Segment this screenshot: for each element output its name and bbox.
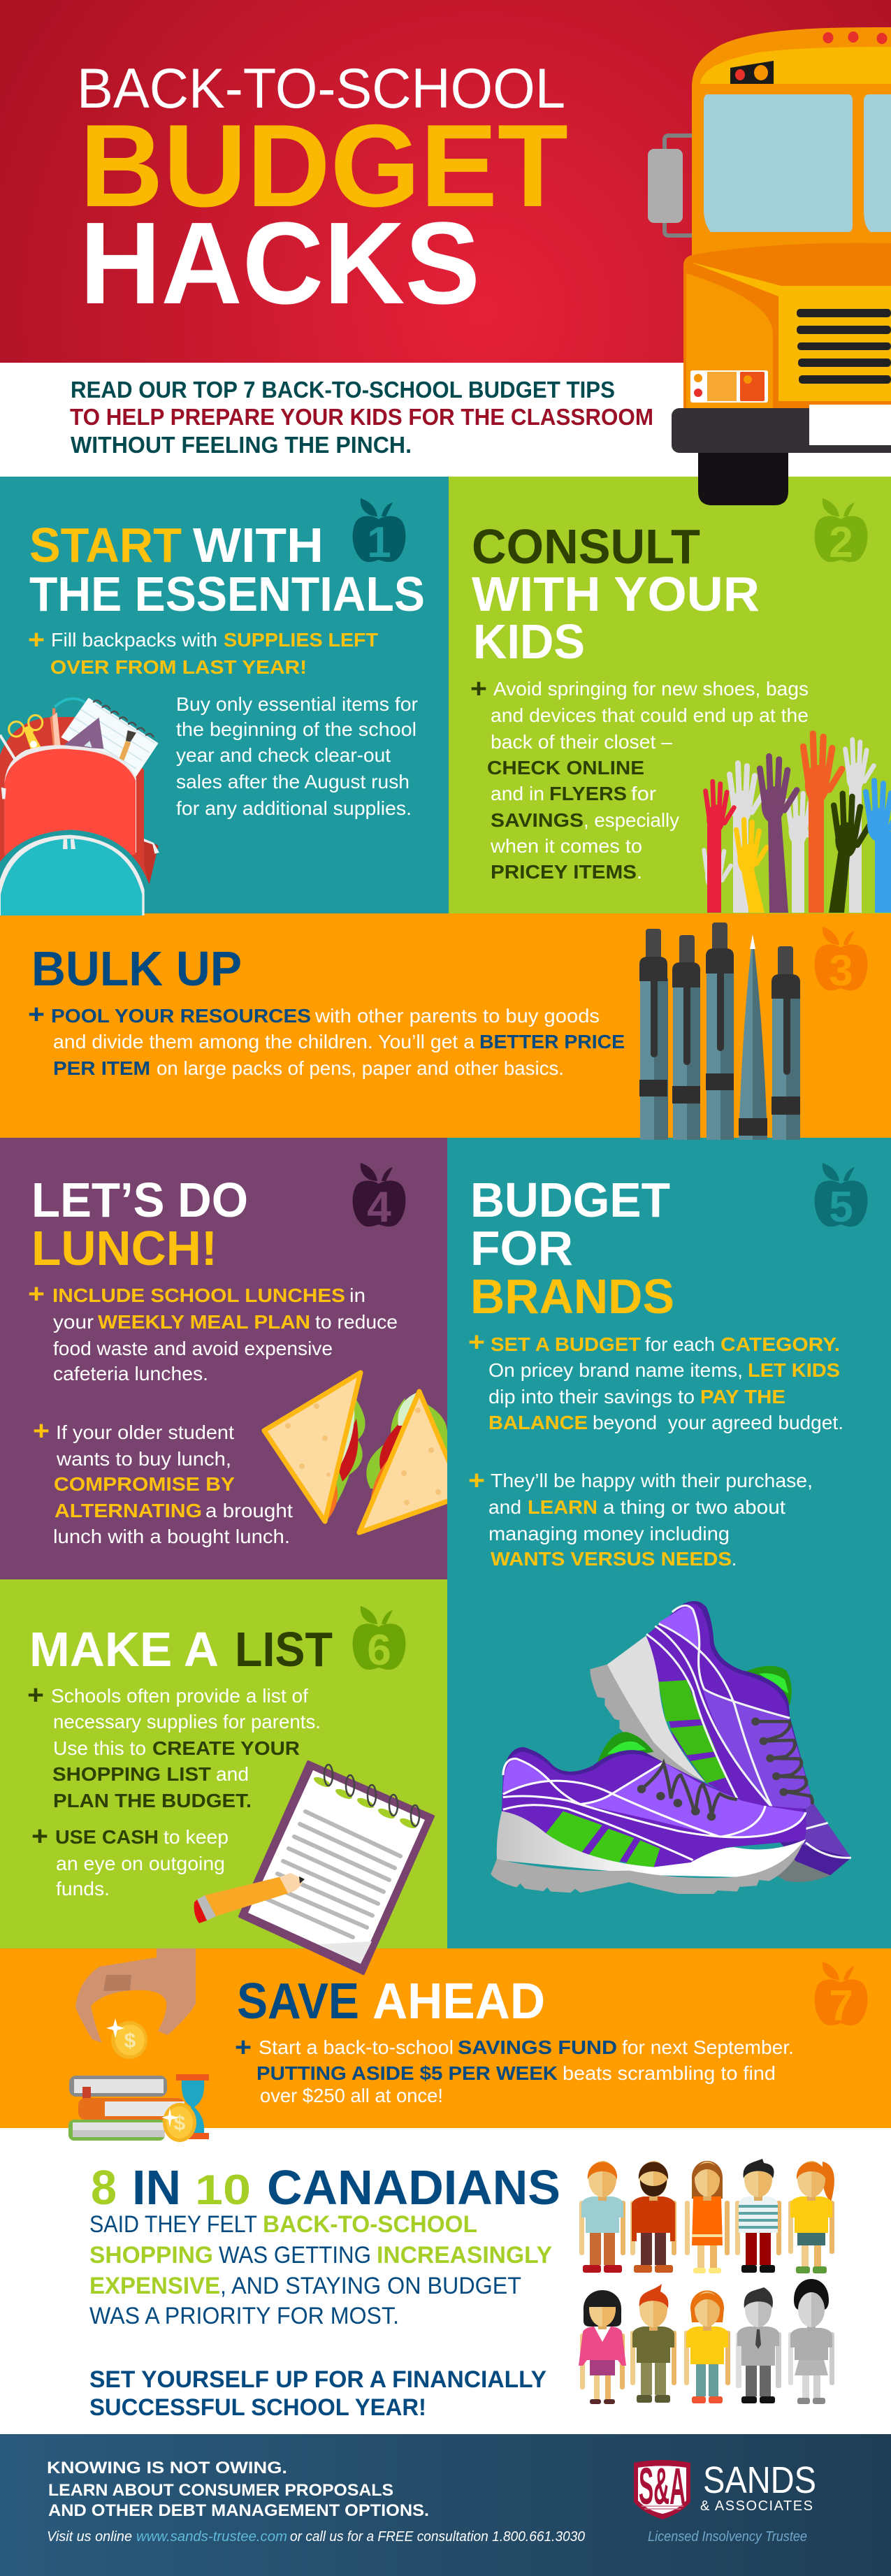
text block: and divide them among the children. You’ll get a bbox=[53, 1031, 475, 1052]
text block: use cash bbox=[31, 1822, 229, 1900]
yellow hand bbox=[737, 820, 767, 913]
illustration: raised hands bbox=[704, 734, 891, 913]
text block: use cash: funds. bbox=[56, 1878, 110, 1900]
icon: apple 2 bbox=[815, 498, 867, 567]
text block: wants versus needs: + bbox=[468, 1466, 485, 1496]
heading: WITH YOUR bbox=[472, 567, 760, 621]
text block: when it comes to bbox=[490, 835, 642, 857]
background bbox=[0, 1948, 891, 2128]
heading: SAVE bbox=[237, 1974, 359, 2029]
pen 5 bbox=[772, 946, 800, 1140]
heading: LIST bbox=[235, 1622, 333, 1677]
icon: apple 1 bbox=[353, 498, 405, 567]
footer message: KNOWING IS NOT OWING. bbox=[47, 2459, 287, 2477]
icon: apple 6 bbox=[353, 1606, 405, 1674]
text block: supplies left over: Fill backpacks with bbox=[51, 629, 217, 651]
contact line bbox=[47, 2529, 585, 2545]
text block: essential items bbox=[176, 693, 418, 819]
pen 2 bbox=[672, 935, 700, 1140]
text block: for next September. bbox=[622, 2036, 794, 2058]
mirror bbox=[648, 136, 692, 236]
illustration: hand dropping coin bbox=[75, 1948, 196, 2059]
text block: + bbox=[28, 1000, 45, 1029]
tire bbox=[698, 447, 788, 505]
heading: WITH bbox=[193, 518, 324, 572]
logo: Sands and Associates: & ASSOCIATES bbox=[700, 2498, 813, 2514]
text block: PUTTING ASIDE $5 PER WEEK bbox=[256, 2062, 558, 2084]
text block: essential items: for any additional supplies. bbox=[176, 797, 412, 819]
person 5 bbox=[788, 2161, 834, 2273]
text block: wants versus needs: They’ll be happy with their purchase, bbox=[491, 1470, 813, 1491]
text block: shopping list: PLAN THE BUDGET. bbox=[53, 1790, 252, 1811]
text block: older student bbox=[33, 1417, 293, 1547]
text block: use cash: an eye on outgoing bbox=[56, 1853, 225, 1874]
orange hand bbox=[803, 734, 842, 913]
illustration: stacked books, hourglass, coin bbox=[68, 2074, 209, 2142]
text block: set a budget: BALANCE bbox=[488, 1412, 588, 1433]
text block: , especially bbox=[584, 809, 679, 831]
text block: older student: a brought bbox=[205, 1500, 293, 1521]
text block: Avoid springing for new shoes, bags bbox=[493, 678, 809, 700]
pen 4 pointed bbox=[739, 934, 767, 1140]
heading bbox=[472, 519, 760, 669]
heading: BRANDS bbox=[470, 1269, 674, 1324]
icon: apple 1: 1 bbox=[367, 519, 391, 567]
illustration: notepad and pencil bbox=[194, 1762, 433, 1974]
text block: set a budget: CATEGORY. bbox=[720, 1333, 840, 1355]
text block: essential items: Buy only essential items for bbox=[176, 693, 418, 715]
call to action text bbox=[89, 2366, 546, 2421]
contact line: Visit us online bbox=[47, 2529, 132, 2545]
dark hand bbox=[829, 794, 869, 913]
title: HACKS bbox=[80, 198, 480, 328]
contact line: or call us for a FREE consultation 1.800.661.3030 bbox=[290, 2529, 585, 2545]
person 3 bbox=[685, 2161, 730, 2273]
panel 1: start with the essentials bbox=[0, 477, 449, 916]
panel 7: save ahead bbox=[0, 1948, 891, 2142]
illustration: school bus bbox=[648, 27, 891, 505]
text block: shopping list bbox=[27, 1681, 321, 1811]
text block: set a budget: On pricey brand name items, bbox=[488, 1359, 743, 1381]
heading bbox=[29, 1622, 333, 1677]
text block bbox=[470, 674, 809, 883]
text block: older student: + bbox=[33, 1417, 50, 1446]
text block: for bbox=[631, 783, 656, 804]
heading bbox=[237, 1974, 545, 2029]
panel 6: make a list bbox=[0, 1579, 447, 1974]
text block: over $250 all at once! bbox=[260, 2085, 443, 2106]
statistic text: WAS A PRIORITY FOR MOST. bbox=[89, 2303, 399, 2329]
text block: wants versus needs: managing money including bbox=[488, 1523, 730, 1544]
text block: meal plan: in bbox=[349, 1285, 365, 1306]
text block: use cash: to keep bbox=[164, 1826, 229, 1848]
text block: meal plan: cafeteria lunches. bbox=[53, 1363, 208, 1384]
text block: meal plan bbox=[28, 1280, 398, 1384]
intro text: TO HELP PREPARE YOUR KIDS FOR THE CLASSROOM bbox=[70, 404, 653, 430]
footer message bbox=[47, 2459, 429, 2520]
statistic text: WAS GETTING bbox=[219, 2242, 371, 2269]
person 4 bbox=[735, 2159, 781, 2273]
text block: set a budget bbox=[468, 1328, 843, 1433]
text block: essential items: the beginning of the school bbox=[176, 718, 416, 740]
illustration: running shoes bbox=[491, 1601, 851, 1894]
pen 1 bbox=[639, 929, 668, 1140]
person 6 bbox=[579, 2290, 626, 2404]
warning lights bbox=[730, 61, 774, 84]
text block: meal plan: food waste and avoid expensive bbox=[53, 1338, 333, 1359]
icon: apple 2: 2 bbox=[829, 519, 853, 567]
logo: Sands and Associates: S&A bbox=[639, 2457, 686, 2515]
text block: shopping list: CREATE YOUR bbox=[152, 1737, 300, 1759]
text block: wants versus needs: WANTS VERSUS NEEDS bbox=[491, 1548, 732, 1570]
icon: apple 4: 4 bbox=[367, 1183, 391, 1231]
heading: LET’S DO bbox=[31, 1173, 248, 1227]
title bbox=[77, 57, 568, 328]
footer message: AND OTHER DEBT MANAGEMENT OPTIONS. bbox=[48, 2501, 429, 2520]
panel 5: budget for brands bbox=[447, 1138, 891, 1948]
text block: older student: COMPROMISE BY bbox=[54, 1473, 235, 1495]
text block: + bbox=[235, 2033, 252, 2062]
text block: set a budget: + bbox=[468, 1328, 485, 1357]
text block: set a budget: PAY THE bbox=[700, 1386, 785, 1408]
background white bbox=[0, 2128, 891, 2434]
header bbox=[0, 0, 891, 505]
icon: apple 7 bbox=[815, 1962, 867, 2030]
text block: PER ITEM bbox=[53, 1057, 150, 1079]
text block: + bbox=[470, 674, 487, 704]
person 10 bbox=[788, 2279, 834, 2404]
red hand bbox=[706, 781, 734, 913]
background bbox=[0, 477, 449, 913]
icon: apple 5 bbox=[815, 1163, 867, 1231]
panel 3: bulk up bbox=[0, 913, 891, 1140]
text block: shopping list: SHOPPING LIST bbox=[52, 1763, 211, 1785]
text block: shopping list: necessary supplies for parents. bbox=[53, 1711, 321, 1732]
text block: set a budget: SET A BUDGET bbox=[491, 1333, 641, 1355]
heading: START bbox=[29, 518, 182, 572]
text block: and devices that could end up at the bbox=[491, 704, 809, 726]
background bbox=[0, 913, 891, 1138]
illustration: stacked books, hourglass, coin: $ bbox=[174, 2112, 186, 2135]
illustration: sandwich bbox=[264, 1373, 463, 1533]
statistic text: EXPENSIVE bbox=[89, 2273, 220, 2299]
footer bbox=[0, 2434, 891, 2576]
statistic text: BACK-TO-SCHOOL bbox=[263, 2211, 477, 2238]
roof lights bbox=[823, 31, 888, 44]
text block: shopping list: Schools often provide a list of bbox=[51, 1685, 308, 1707]
text block: supplies left over: OVER FROM LAST YEAR! bbox=[50, 656, 307, 678]
text block: PRICEY ITEMS bbox=[491, 861, 637, 883]
text block: meal plan: your bbox=[53, 1311, 94, 1333]
text block: POOL YOUR RESOURCES bbox=[51, 1005, 311, 1027]
cab bbox=[692, 27, 891, 259]
statistic text: SHOPPING bbox=[89, 2242, 213, 2269]
text block: back of their closet – bbox=[491, 731, 672, 753]
footer background bbox=[0, 2434, 891, 2576]
text block: wants versus needs: . bbox=[732, 1548, 737, 1570]
text block: SAVINGS bbox=[491, 809, 584, 831]
text block: on large packs of pens, paper and other basics. bbox=[157, 1057, 564, 1079]
red banner bbox=[0, 0, 891, 363]
heading: BUDGET bbox=[470, 1173, 670, 1227]
licence plate bbox=[809, 405, 891, 445]
statistic text bbox=[89, 2211, 552, 2329]
visor bbox=[700, 47, 891, 84]
text block: meal plan: + bbox=[28, 1280, 45, 1309]
text block: meal plan: INCLUDE SCHOOL LUNCHES bbox=[52, 1285, 345, 1306]
white intro band bbox=[0, 363, 891, 477]
text block: Start a back-to-school bbox=[259, 2036, 454, 2058]
text block: older student: ALTERNATING bbox=[55, 1500, 202, 1521]
text block: use cash: + bbox=[31, 1822, 48, 1851]
text block: BETTER PRICE bbox=[479, 1031, 625, 1052]
white hands bbox=[704, 739, 874, 913]
illustration: hand dropping coin: $ bbox=[124, 2029, 136, 2053]
text block: supplies left over bbox=[28, 625, 378, 678]
heading: BULK UP bbox=[31, 941, 242, 996]
text block: meal plan: WEEKLY MEAL PLAN bbox=[98, 1311, 310, 1333]
text block: meal plan: to reduce bbox=[315, 1311, 398, 1333]
statistic text: SAID THEY FELT bbox=[89, 2211, 257, 2238]
text block: essential items: year and check clear-out bbox=[176, 744, 391, 766]
text block: supplies left over: SUPPLIES LEFT bbox=[224, 629, 378, 651]
text block: and in bbox=[491, 783, 544, 804]
text block: beats scrambling to find bbox=[563, 2062, 776, 2084]
pen 3 bbox=[706, 922, 734, 1140]
illustration: backpack bbox=[0, 697, 159, 916]
text block: older student: If your older student bbox=[56, 1421, 234, 1443]
icon: apple 3 bbox=[815, 927, 867, 995]
panel: statistic 8 in 10 Canadians bbox=[0, 2128, 891, 2434]
text block: wants versus needs bbox=[468, 1466, 813, 1570]
icon: apple 3: 3 bbox=[829, 947, 853, 995]
windows bbox=[704, 94, 891, 232]
heading: 8 in 10 Canadians: IN bbox=[132, 2160, 181, 2215]
heading: 8 in 10 Canadians bbox=[91, 2160, 560, 2215]
heading bbox=[29, 518, 425, 621]
text block bbox=[28, 1000, 625, 1079]
title: BACK-TO-SCHOOL bbox=[77, 57, 565, 120]
heading: LUNCH! bbox=[31, 1221, 217, 1275]
text block: FLYERS bbox=[549, 783, 627, 804]
intro text bbox=[70, 377, 653, 458]
person 1 bbox=[579, 2161, 625, 2273]
blue hand bbox=[866, 781, 891, 913]
heading: FOR bbox=[470, 1221, 573, 1275]
title: BUDGET bbox=[80, 100, 568, 231]
heading: 8 in 10 Canadians: 8 bbox=[91, 2160, 117, 2215]
heading: MAKE A bbox=[29, 1622, 219, 1677]
text block: set a budget: for each bbox=[645, 1333, 715, 1355]
hood bbox=[683, 243, 891, 409]
panel 4: let's do lunch bbox=[0, 1138, 463, 1579]
call to action text: SUCCESSFUL SCHOOL YEAR! bbox=[89, 2394, 426, 2421]
text block: set a budget: dip into their savings to bbox=[488, 1386, 695, 1408]
person 9 bbox=[736, 2287, 781, 2403]
text block: SAVINGS FUND bbox=[458, 2036, 617, 2058]
heading: THE ESSENTIALS bbox=[29, 567, 425, 621]
text block: CHECK ONLINE bbox=[487, 757, 644, 779]
heading: KIDS bbox=[473, 614, 585, 669]
icon: apple 4 bbox=[353, 1163, 405, 1231]
statistic text: INCREASINGLY bbox=[377, 2242, 552, 2269]
text block: wants versus needs: a thing or two about bbox=[603, 1496, 785, 1518]
illustration: ten people bbox=[579, 2159, 834, 2404]
background bbox=[0, 1579, 447, 1948]
icon: apple 6: 6 bbox=[367, 1626, 391, 1674]
panel 2: consult with your kids bbox=[449, 477, 891, 913]
purple hand bbox=[760, 756, 797, 913]
text block: supplies left over: + bbox=[28, 625, 45, 655]
person 2 bbox=[630, 2161, 676, 2273]
text block: essential items: sales after the August rush bbox=[176, 771, 410, 793]
call to action text: SET YOURSELF UP FOR A FINANCIALLY bbox=[89, 2366, 546, 2393]
background bbox=[0, 1138, 447, 1579]
headlight bbox=[690, 370, 768, 403]
icon: apple 7: 7 bbox=[829, 1982, 853, 2030]
bumper bbox=[672, 408, 891, 453]
intro text: WITHOUT FEELING THE PINCH. bbox=[71, 432, 412, 458]
grille bbox=[797, 309, 891, 384]
text block: with other parents to buy goods bbox=[314, 1005, 600, 1027]
footer message: LEARN ABOUT CONSUMER PROPOSALS bbox=[48, 2481, 393, 2500]
text block: older student: lunch with a bought lunch. bbox=[53, 1526, 290, 1547]
heading bbox=[470, 1173, 674, 1324]
text block: shopping list: and bbox=[216, 1763, 249, 1785]
person 8 bbox=[684, 2291, 730, 2403]
text block: older student: wants to buy lunch, bbox=[56, 1448, 231, 1470]
text block: . bbox=[637, 861, 642, 883]
text block: wants versus needs: LEARN bbox=[528, 1496, 597, 1518]
heading bbox=[31, 1173, 248, 1275]
statistic text: , AND STAYING ON BUDGET bbox=[220, 2273, 521, 2299]
contact line: www.sands-trustee.com bbox=[136, 2529, 287, 2545]
background bbox=[449, 477, 891, 913]
illustration: pens bbox=[639, 922, 800, 1140]
icon: apple 5: 5 bbox=[829, 1183, 853, 1231]
text block: set a budget: LET KIDS bbox=[748, 1359, 840, 1381]
text block: wants versus needs: and bbox=[488, 1496, 521, 1518]
heading: CONSULT bbox=[472, 519, 700, 574]
text block: shopping list: + bbox=[27, 1681, 44, 1710]
heading: 8 in 10 Canadians: 10 bbox=[195, 2166, 251, 2213]
intro text: READ OUR TOP 7 BACK-TO-SCHOOL BUDGET TIPS bbox=[71, 377, 615, 403]
heading: AHEAD bbox=[372, 1974, 545, 2029]
text block: use cash: USE CASH bbox=[55, 1826, 159, 1848]
text block: set a budget: beyond your agreed budget. bbox=[593, 1412, 843, 1433]
logo: Sands and Associates bbox=[634, 2457, 816, 2519]
trustee tagline: Licensed Insolvency Trustee bbox=[648, 2529, 807, 2545]
background bbox=[447, 1138, 891, 1948]
person 7 bbox=[630, 2284, 676, 2403]
text block: shopping list: Use this to bbox=[53, 1737, 146, 1759]
logo: Sands and Associates: SANDS bbox=[703, 2459, 816, 2501]
text block bbox=[235, 2033, 794, 2106]
heading: 8 in 10 Canadians: CANADIANS bbox=[267, 2160, 560, 2215]
